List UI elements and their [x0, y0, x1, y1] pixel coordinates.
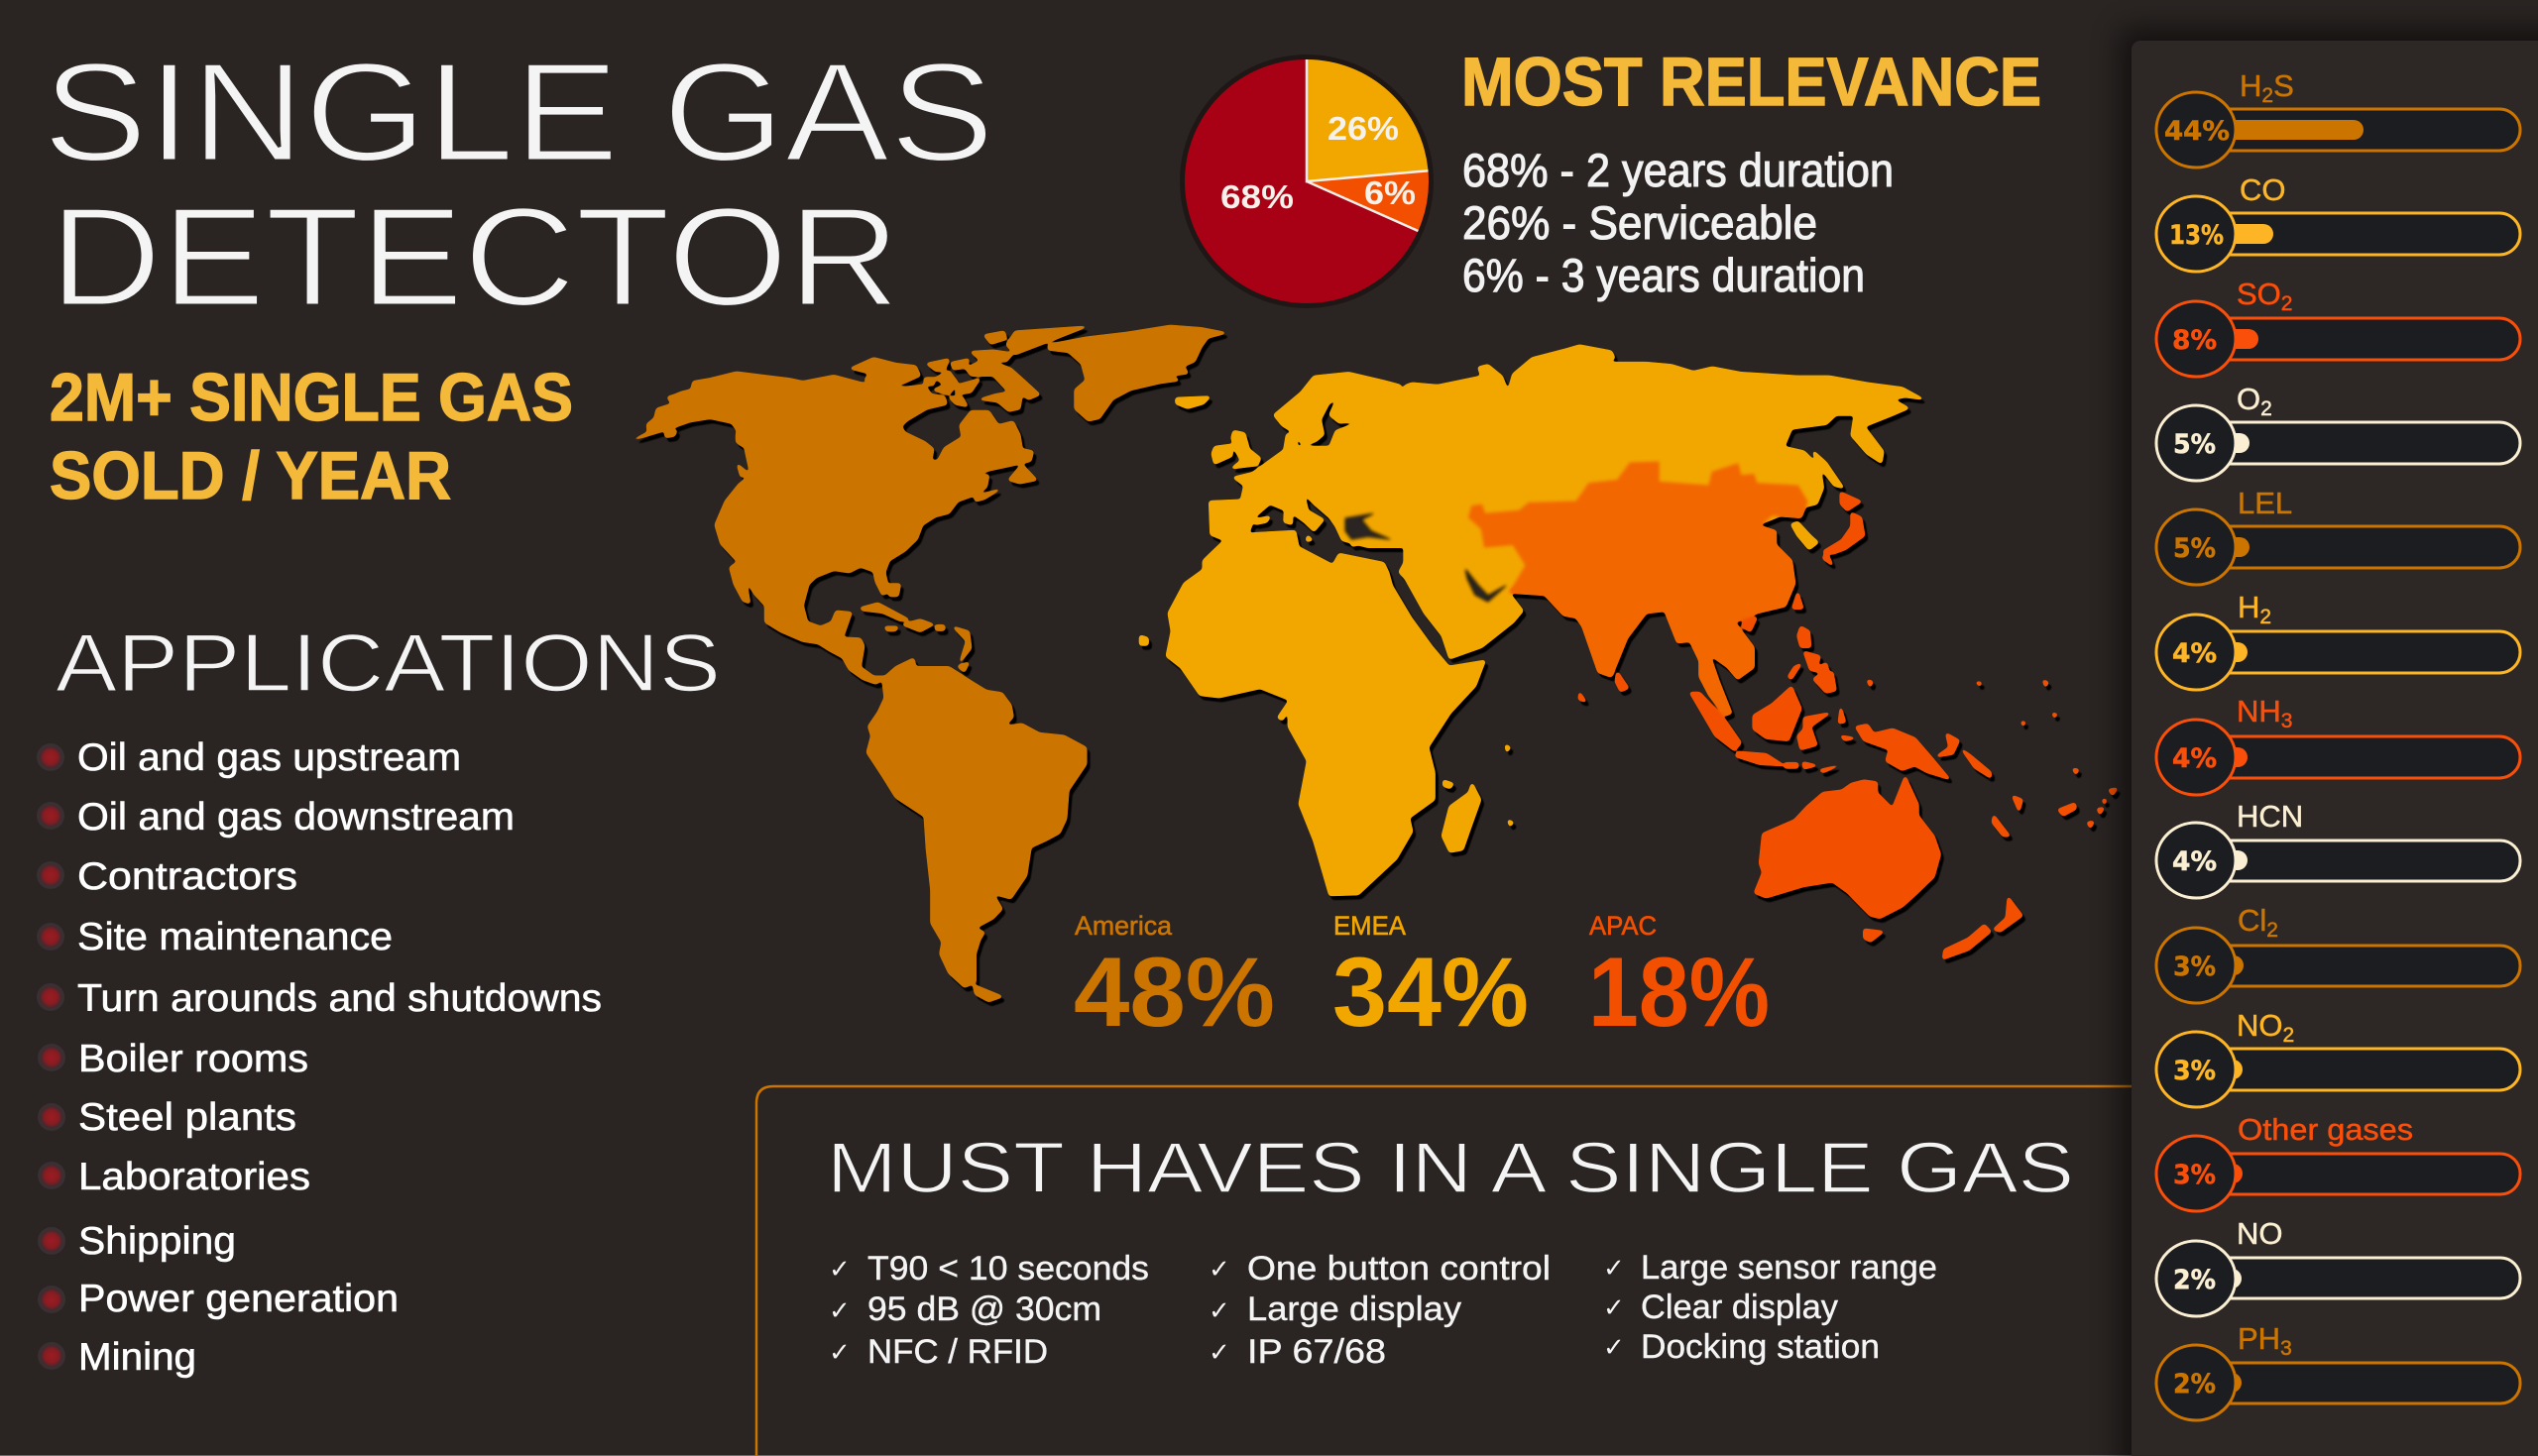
region stat: America: America [1075, 911, 1173, 941]
must haves column 3: ✓ [1603, 1254, 1625, 1284]
gas row: H2 [2156, 590, 2520, 690]
applications list: Site maintenance [77, 916, 393, 958]
gas row: LEL: LEL [2238, 486, 2292, 520]
gas row: NO [2156, 1216, 2520, 1316]
gas row: HCN [2156, 799, 2520, 898]
gas row: Cl2 [2156, 903, 2520, 1003]
gas row: LEL [2156, 486, 2520, 585]
subtitle: units sold: 2M+ SINGLE GAS [50, 360, 573, 435]
heading: applications: APPLICATIONS [56, 616, 721, 709]
must haves column 3: Clear display [1641, 1288, 1838, 1326]
pie chart: 68% [1220, 178, 1294, 215]
applications list: Mining [78, 1336, 196, 1379]
map: America region [634, 326, 1225, 1001]
gas row: NO: NO [2237, 1216, 2282, 1251]
applications list: Power generation [78, 1278, 399, 1320]
gas row: NO2: 3% [2173, 1056, 2216, 1086]
map: Asia Pacific islands and Australia [1579, 493, 2117, 958]
applications list: Turn arounds and shutdowns [77, 977, 602, 1020]
pie chart [1180, 55, 1434, 308]
relevance legend text: 68% - 2 years duration [1462, 144, 1894, 196]
gas row: CO: CO [2240, 172, 2286, 207]
panel: gas breakdown [2132, 41, 2538, 1456]
gas row: CO: 13% [2169, 220, 2224, 251]
applications list: Boiler rooms [78, 1038, 308, 1080]
gas row: CO [2156, 172, 2520, 272]
panel: gas shadow [2120, 28, 2538, 1456]
gas row: NO: 2% [2173, 1265, 2216, 1295]
region stat: EMEA: 34% [1332, 937, 1529, 1047]
applications list: Oil and gas upstream [77, 736, 461, 779]
gas row: O2: O [2237, 382, 2260, 416]
must haves column 3: ✓ [1603, 1293, 1625, 1323]
heading: most relevance: MOST RELEVANCE [1461, 44, 2041, 120]
must haves column 2: ✓ [1209, 1255, 1230, 1285]
pie chart: 6% [1364, 174, 1416, 211]
gas row: SO2: SO [2237, 277, 2281, 311]
title: SINGLE GAS [43, 34, 994, 191]
subtitle: units sold: SOLD / YEAR [50, 438, 451, 513]
must haves column 2: IP 67/68 [1247, 1333, 1386, 1371]
map: China and South Asia region [1469, 462, 1807, 716]
must haves column 1: T90 < 10 seconds [867, 1250, 1149, 1288]
gas row: Cl2: 2 [2266, 919, 2278, 942]
gas row: PH3: 3 [2280, 1337, 2292, 1360]
relevance legend text: 6% - 3 years duration [1462, 249, 1865, 301]
applications list [37, 736, 602, 1379]
applications list: Contractors [77, 855, 297, 898]
gas row: H2: 4% [2172, 638, 2217, 669]
must haves column 3: Large sensor range [1641, 1249, 1937, 1287]
pie chart: 26% [1327, 110, 1399, 147]
must haves column 3: Docking station [1641, 1328, 1880, 1366]
region stat: APAC: 18% [1588, 937, 1770, 1047]
gas row: NO2: 2 [2282, 1024, 2294, 1047]
gas row: H2S: H [2240, 68, 2261, 103]
gas row: LEL: 5% [2173, 533, 2216, 564]
region stat: America: 48% [1074, 937, 1275, 1047]
must haves column 2: ✓ [1209, 1338, 1230, 1368]
gas row: Cl2: 3% [2173, 952, 2216, 982]
gas row: H2S: S [2273, 68, 2294, 103]
title: DETECTOR [50, 178, 900, 336]
gas row: PH3 [2156, 1321, 2520, 1420]
gas row: NO2 [2156, 1008, 2520, 1107]
world map [634, 326, 2117, 1001]
gas row: H2S [2156, 68, 2520, 168]
gas row: HCN: HCN [2237, 799, 2303, 834]
gas row: Other gases: 3% [2173, 1160, 2216, 1190]
gas row: NH3: 4% [2172, 743, 2217, 774]
must haves column 2: One button control [1247, 1250, 1551, 1288]
must haves column 2: Large display [1247, 1290, 1461, 1328]
gas row: SO2: 8% [2172, 325, 2217, 356]
region stat: APAC: APAC [1589, 911, 1657, 941]
gas row: Cl2: Cl [2238, 903, 2266, 938]
gas row: SO2 [2156, 277, 2520, 377]
must haves column 1: NFC / RFID [867, 1333, 1048, 1371]
panel: must haves box outline [756, 1086, 2132, 1456]
gas row: SO2: 2 [2281, 292, 2292, 315]
relevance legend text [1462, 144, 1894, 301]
gas row: NO2: NO [2237, 1008, 2282, 1043]
must haves column 1: 95 dB @ 30cm [867, 1290, 1101, 1328]
must haves column 2 [1209, 1250, 1551, 1371]
gas row: NH3: NH [2237, 694, 2281, 728]
gas row: H2: 2 [2259, 606, 2271, 628]
gas row: PH3: 2% [2173, 1369, 2216, 1400]
must haves column 3 [1603, 1249, 1937, 1366]
gas row: H2S: 2 [2261, 84, 2273, 107]
must haves column 3: ✓ [1603, 1333, 1625, 1363]
must haves column 1: ✓ [829, 1255, 851, 1285]
gas row: NH3 [2156, 694, 2520, 795]
gas row: Other gases [2156, 1112, 2520, 1211]
gas row: O2: 5% [2173, 429, 2216, 460]
gas row: H2S: 44% [2164, 116, 2230, 147]
must haves column 1: ✓ [829, 1296, 851, 1326]
must haves column 2: ✓ [1209, 1296, 1230, 1326]
gas row: PH3: PH [2238, 1321, 2280, 1356]
applications list: Laboratories [78, 1156, 310, 1198]
gas row: H2: H [2238, 590, 2259, 624]
region stat: EMEA: EMEA [1333, 911, 1406, 941]
gas row: O2: 2 [2260, 397, 2272, 420]
gas row: Other gases: Other gases [2238, 1112, 2413, 1147]
must haves column 1 [829, 1250, 1149, 1371]
subtitle: units sold [50, 360, 573, 513]
title [43, 34, 994, 336]
gas row: NH3: 3 [2281, 710, 2292, 732]
map: EMEA region [1140, 345, 1923, 895]
heading: must haves: MUST HAVES IN A SINGLE GAS [827, 1129, 2074, 1208]
gas row: O2 [2156, 382, 2520, 481]
applications list: Oil and gas downstream [77, 796, 515, 839]
applications list: Shipping [78, 1220, 236, 1263]
gas row: HCN: 4% [2172, 846, 2217, 877]
relevance legend text: 26% - Serviceable [1462, 196, 1817, 249]
must haves column 1: ✓ [829, 1338, 851, 1368]
applications list: Steel plants [78, 1096, 296, 1139]
